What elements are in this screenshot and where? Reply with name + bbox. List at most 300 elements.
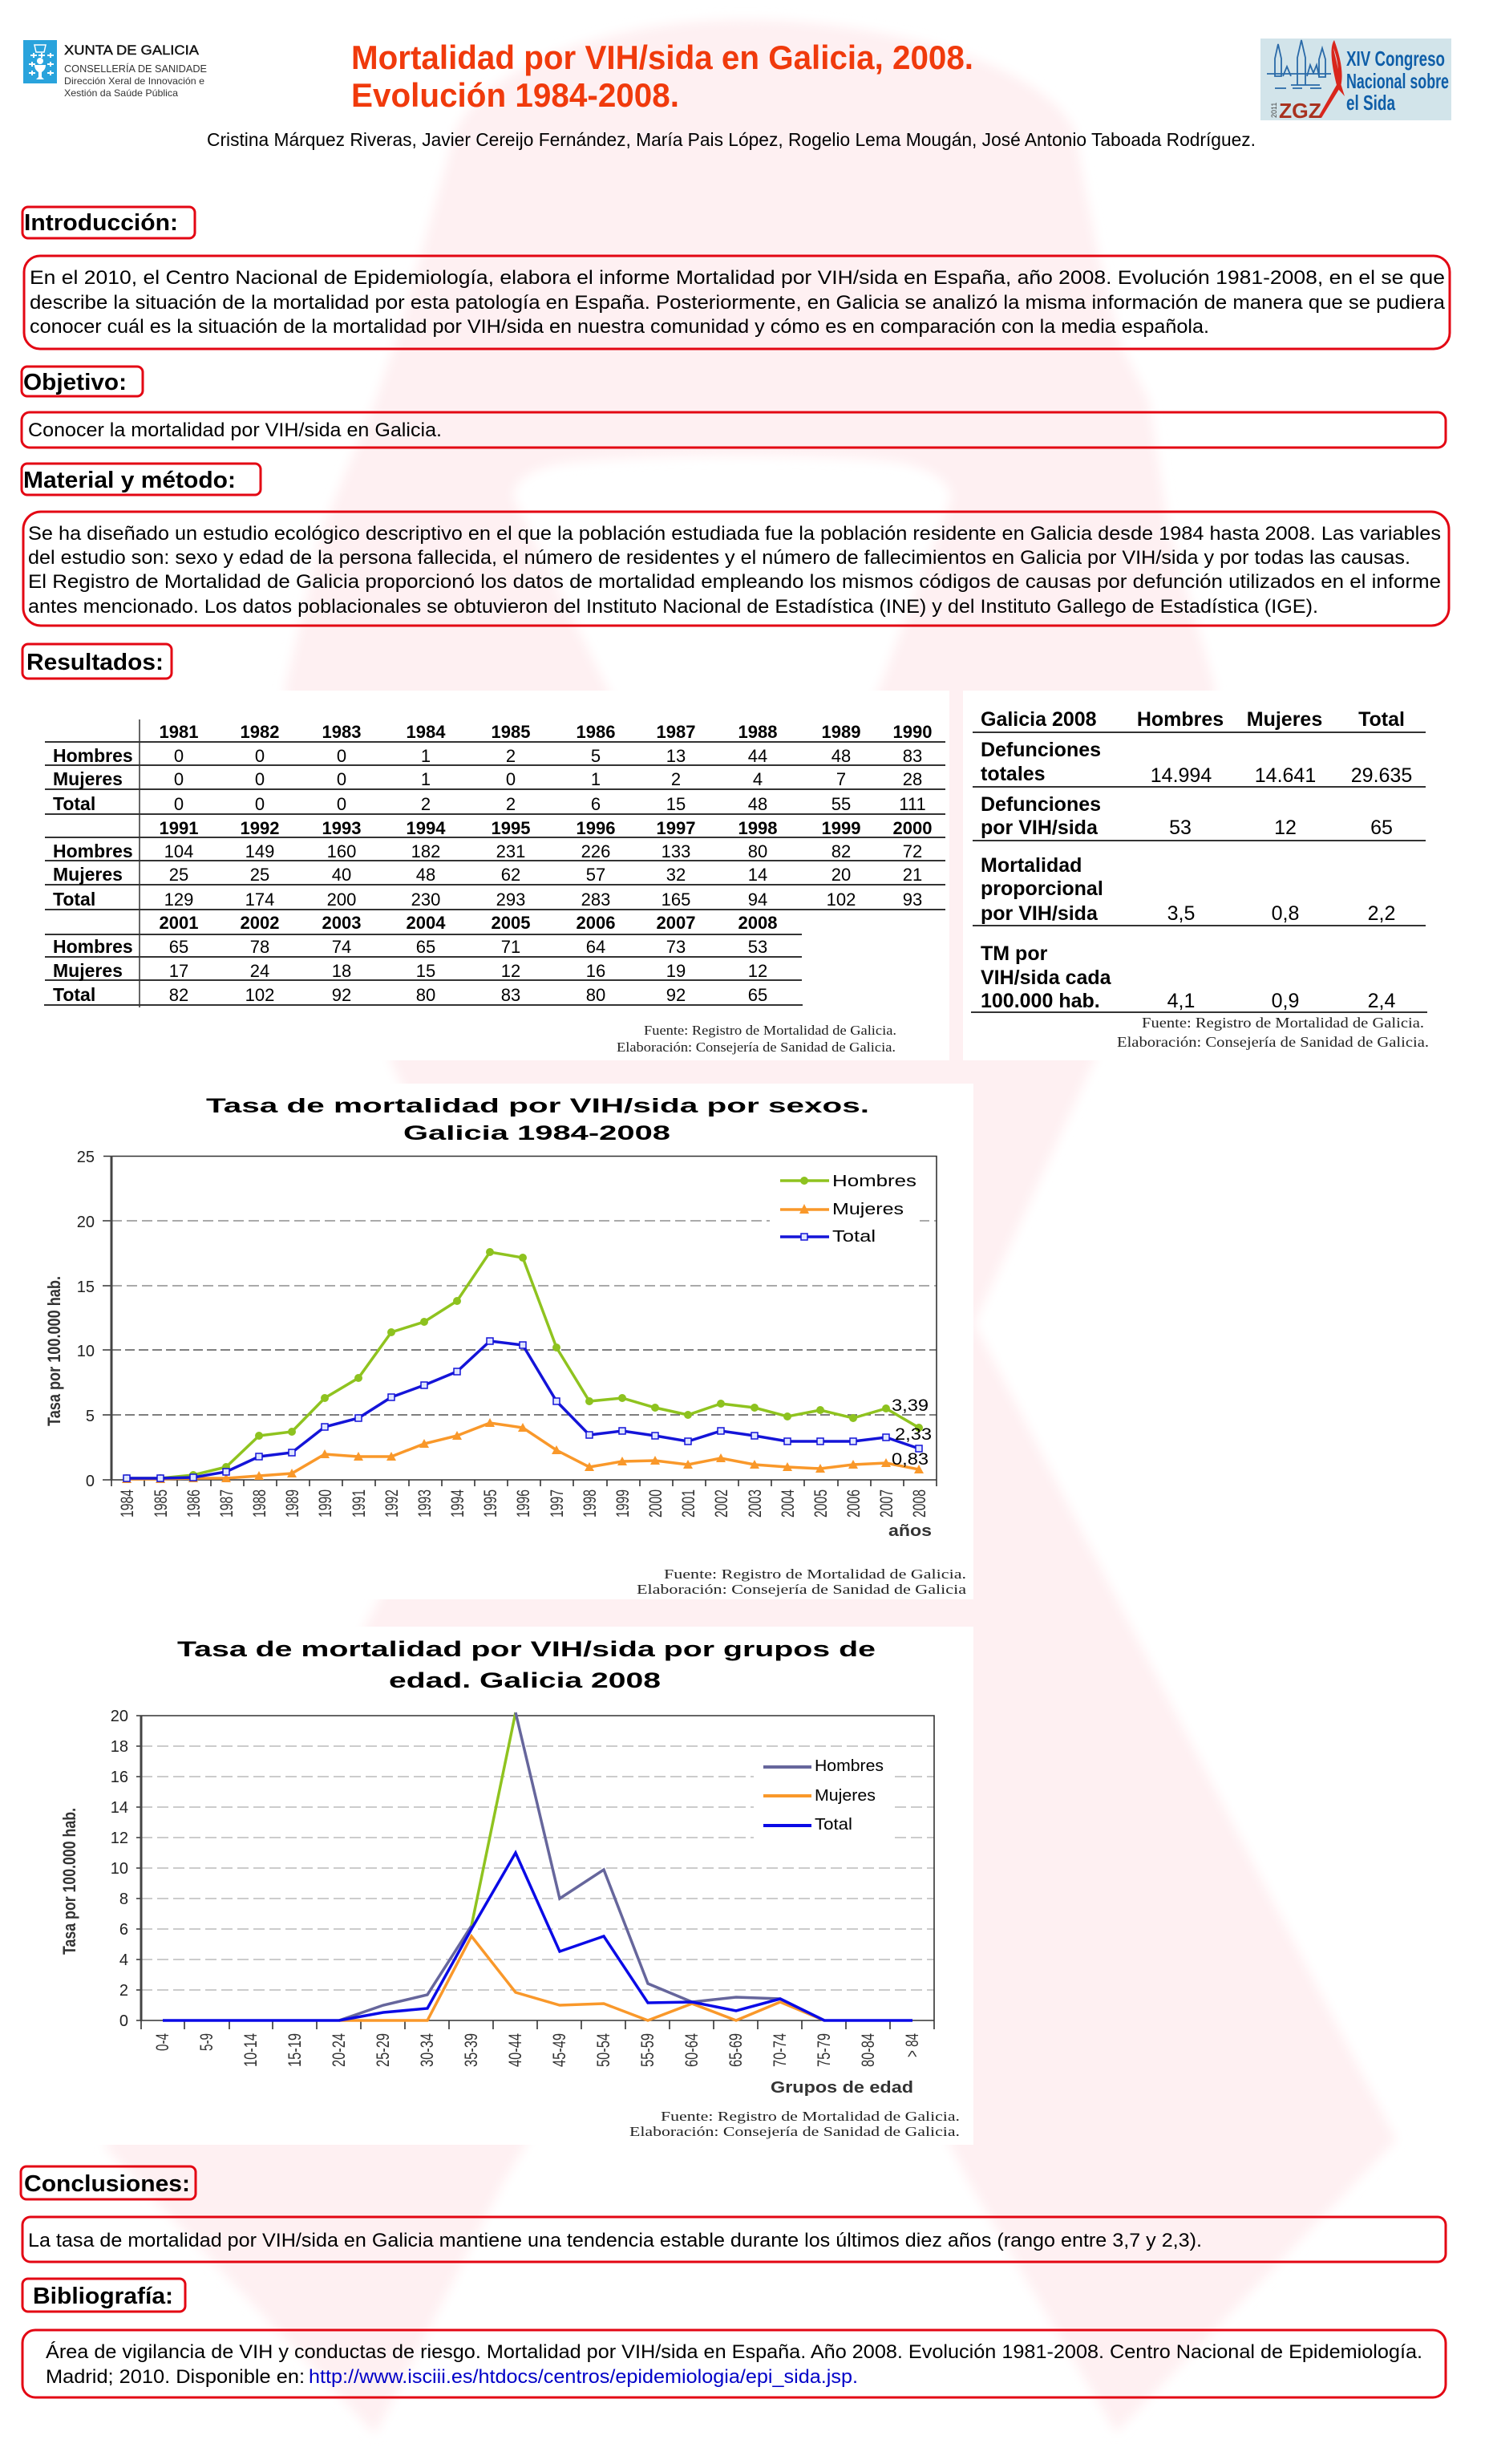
summary row labels: por VIH/sida (981, 902, 1099, 925)
series: Total (163, 1853, 912, 2020)
year labels (117, 1489, 929, 1518)
heading: Resultados: Resultados: (26, 650, 164, 675)
year headers: 1997 (657, 818, 695, 838)
panel: bibliografía text (22, 2330, 1446, 2397)
panel: conclusiones text: La tasa de mortalidad por VIH/sida en Galicia mantiene una tendencia estable durante los últimos diez años (rango entre 3,7 y 2,3). (28, 2230, 1202, 2251)
year headers: 1991 (160, 818, 198, 838)
age group labels: 30-34 (417, 2033, 437, 2067)
legend: Mujeres (815, 1787, 876, 1805)
logo text: Dirección Xeral de Innovación e (64, 75, 204, 87)
year labels: 1990 (315, 1489, 335, 1518)
year labels: 2002 (711, 1489, 731, 1518)
year headers: 1994 (407, 818, 446, 838)
panel: introducción text: conocer cuál es la situación de la mortalidad por VIH/sida en nuestra comunidad y cómo es en comparación con la media española. (30, 316, 1209, 338)
year labels: 2003 (745, 1489, 765, 1518)
table values: 226 (581, 841, 610, 861)
table values: 73 (666, 937, 686, 957)
table values: 53 (748, 937, 767, 957)
age group labels: 15-19 (285, 2033, 305, 2067)
chart title: Tasa de mortalidad por VIH/sida por sexos. (206, 1095, 869, 1117)
y axis labels: 12 (111, 1830, 128, 1847)
year headers: 2002 (241, 913, 279, 933)
end value labels: 2,33 (895, 1425, 932, 1444)
table values: 19 (666, 961, 686, 981)
panel: material y método text (23, 512, 1449, 626)
table values: 230 (411, 890, 440, 910)
year labels: 2004 (778, 1489, 798, 1518)
year labels: 1998 (580, 1489, 600, 1518)
table values: 25 (250, 865, 269, 885)
year headers: 1996 (577, 818, 615, 838)
age group labels: 50-54 (593, 2033, 613, 2067)
table values: 18 (332, 961, 351, 981)
table values: 82 (169, 985, 188, 1005)
summary row labels: TM por (981, 942, 1048, 965)
summary row labels: totales (981, 763, 1046, 785)
table values: 2 (421, 794, 431, 814)
age group labels: 25-29 (373, 2033, 393, 2067)
series: Mujeres (127, 1423, 919, 1479)
summary values: 14.641 (1255, 764, 1316, 787)
table values: 78 (250, 937, 269, 957)
summary source note: Fuente: Registro de Mortalidad de Galicia. (1142, 1015, 1424, 1031)
year headers: 1998 (738, 818, 777, 838)
y axis labels: 5 (86, 1408, 95, 1425)
year labels: 1999 (613, 1489, 633, 1518)
table values: 80 (586, 985, 605, 1005)
year headers: 2000 (893, 818, 932, 838)
summary source note (1117, 1015, 1429, 1050)
panel: bibliografía text: http://www.isciii.es/htdocs/centros/epidemiologia/epi_sida.jsp. (309, 2366, 858, 2388)
row labels: Mujeres (53, 768, 123, 789)
table values: 0 (255, 794, 265, 814)
year headers: 1987 (657, 722, 695, 742)
table values: 40 (332, 865, 351, 885)
y axis title: Tasa por 100.000 hab. (59, 1808, 79, 1955)
age group labels: > 84 (902, 2033, 922, 2057)
y axis labels (111, 1708, 128, 2030)
logo text: Xestión da Saúde Pública (64, 87, 178, 99)
table values: 149 (245, 841, 274, 861)
y axis labels: 8 (119, 1891, 128, 1908)
year headers: 1983 (322, 722, 361, 742)
table values: 129 (164, 890, 193, 910)
row labels: Hombres (53, 745, 133, 766)
table source note: Fuente: Registro de Mortalidad de Galicia. (644, 1023, 896, 1038)
table values: 1 (421, 746, 431, 766)
table values: 6 (591, 794, 601, 814)
summary row labels: Defunciones (981, 739, 1101, 761)
summary row labels (981, 708, 1405, 1012)
y axis labels: 15 (77, 1279, 95, 1296)
logo text: CONSELLERÍA DE SANIDADE (64, 63, 207, 75)
table values: 2 (506, 794, 516, 814)
series: Hombres descending (516, 1712, 824, 2020)
legend: Mujeres (832, 1201, 904, 1218)
summary row labels: 100.000 hab. (981, 990, 1100, 1012)
table values: 12 (748, 961, 767, 981)
year labels: 2005 (811, 1489, 831, 1518)
legend: Total (832, 1228, 876, 1246)
summary row labels: Hombres (1137, 708, 1224, 731)
year headers: 1992 (241, 818, 279, 838)
row labels: Total (53, 793, 95, 814)
panel: material y método text: del estudio son: sexo y edad de la persona fallecida, el número de residentes y el número de fallecimientos en Galicia por VIH/sida y por todas las causas. (28, 547, 1410, 569)
legend: Hombres (832, 1173, 916, 1190)
age group labels: 0-4 (152, 2033, 172, 2051)
row labels: Total (53, 984, 95, 1005)
row labels: Mujeres (53, 960, 123, 981)
congress name: XIV Congreso (1346, 47, 1445, 71)
chart title: edad. Galicia 2008 (389, 1668, 661, 1692)
end value labels (892, 1396, 932, 1469)
table rules (44, 742, 945, 1005)
table values: 283 (581, 890, 610, 910)
table values: 32 (666, 865, 686, 885)
table values: 93 (903, 890, 922, 910)
table values: 4 (753, 769, 763, 789)
row labels: Hombres (53, 936, 133, 957)
heading: Bibliografía (22, 2279, 185, 2312)
heading: Introducción: Introducción: (24, 210, 178, 236)
end value labels: 3,39 (892, 1396, 929, 1415)
table values: 174 (245, 890, 274, 910)
table values: 24 (250, 961, 269, 981)
gridlines (141, 1746, 934, 1990)
age group labels: 65-69 (726, 2033, 746, 2067)
age group labels: 20-24 (329, 2033, 349, 2067)
icon: Galicia shield square (23, 40, 57, 83)
table values: 182 (411, 841, 440, 861)
axes (136, 1716, 934, 2029)
age group labels: 60-64 (682, 2033, 702, 2067)
series: Hombres (127, 1252, 919, 1478)
year headers (160, 722, 932, 933)
panel: conclusiones text (22, 2217, 1446, 2262)
table values: 1 (421, 769, 431, 789)
summary values: 0,8 (1272, 902, 1299, 925)
heading: Conclusiones: Conclusiones: (24, 2171, 190, 2197)
heading: Material y método: Material y método: (23, 468, 236, 493)
x axis title: Grupos de edad (771, 2079, 913, 2097)
table values: 102 (827, 890, 856, 910)
year labels: 2008 (909, 1489, 929, 1518)
logo text: XUNTA DE GALICIA (64, 43, 200, 58)
y axis labels: 20 (77, 1214, 95, 1231)
summary values: 2,4 (1368, 990, 1395, 1012)
logo: XIV Congreso Nacional sobre el Sida: 2011 (1270, 103, 1278, 118)
table values: 17 (169, 961, 188, 981)
chart title: Galicia 1984-2008 (403, 1122, 670, 1145)
row labels: Mujeres (53, 864, 123, 885)
y axis labels: 14 (111, 1799, 128, 1817)
table values: 92 (332, 985, 351, 1005)
year headers: 2003 (322, 913, 361, 933)
series: Mujeres (339, 1936, 824, 2020)
year labels: 1995 (480, 1489, 500, 1518)
heading: Objetivo: Objetivo: (23, 370, 127, 395)
table values: 2 (671, 769, 681, 789)
x axis title: años (888, 1522, 932, 1540)
year headers: 1985 (492, 722, 530, 742)
year headers: 2007 (657, 913, 695, 933)
legend: Hombres (815, 1757, 884, 1775)
panel: objetivo text (22, 412, 1446, 448)
chart: tasa por grupos de edad (22, 1627, 973, 2145)
axes (103, 1157, 937, 1486)
table values: 15 (416, 961, 435, 981)
icon: Zaragoza skyline (1267, 40, 1331, 88)
year labels: 1994 (447, 1489, 467, 1518)
age group labels: 5-9 (196, 2033, 216, 2051)
summary row labels: Galicia 2008 (981, 708, 1097, 731)
year headers: 1982 (241, 722, 279, 742)
table values: 28 (903, 769, 922, 789)
y axis labels: 25 (77, 1149, 95, 1166)
table values: 0 (255, 769, 265, 789)
table values: 48 (748, 794, 767, 814)
summary row labels: Defunciones (981, 793, 1101, 816)
year labels: 1989 (282, 1489, 302, 1518)
table values: 0 (337, 769, 346, 789)
main title: Mortalidad por VIH/sida en Galicia, 2008. (351, 38, 973, 76)
summary values: 29.635 (1351, 764, 1412, 787)
table values: 165 (662, 890, 690, 910)
year headers: 2005 (492, 913, 530, 933)
table values: 16 (586, 961, 605, 981)
legend (780, 1173, 916, 1246)
table values: 92 (666, 985, 686, 1005)
summary values: 65 (1370, 817, 1393, 839)
chart source note (629, 2109, 960, 2139)
table values: 133 (662, 841, 690, 861)
year labels: 1993 (415, 1489, 435, 1518)
chart title (177, 1637, 876, 1692)
chart title: Tasa de mortalidad por VIH/sida por grupos de (177, 1637, 876, 1661)
table source note: Elaboración: Consejería de Sanidad de Galicia. (617, 1040, 896, 1055)
table values: 48 (416, 865, 435, 885)
age group labels (152, 2033, 922, 2067)
end value labels: 0,83 (892, 1450, 929, 1469)
age group labels: 45-49 (549, 2033, 569, 2067)
year labels: 2006 (844, 1489, 864, 1518)
year headers: 2006 (577, 913, 615, 933)
table values: 15 (666, 794, 686, 814)
logo text (64, 43, 207, 99)
series: Total (127, 1341, 919, 1478)
panel: material y método text: antes mencionado. Los datos poblacionales se obtuvieron del Instituto Nacional de Estadística (INE) y del Instituto Gallego de Estadística (IGE). (28, 596, 1318, 618)
year labels: 1992 (382, 1489, 402, 1518)
table values: 14 (748, 865, 767, 885)
table values: 57 (586, 865, 605, 885)
summary row labels: Mortalidad (981, 854, 1082, 877)
legend (763, 1757, 884, 1834)
legend: Total (815, 1816, 852, 1834)
chart: tasa por sexos (22, 1084, 973, 1599)
summary values: 0,9 (1272, 990, 1299, 1012)
table values: 80 (416, 985, 435, 1005)
table values: 0 (255, 746, 265, 766)
summary values: 53 (1169, 817, 1192, 839)
panel: bibliografía text: Área de vigilancia de VIH y conductas de riesgo. Mortalidad por VIH/sida en España. Año 2008. Evolución 1981-2008. Centro Nacional de Epidemiología. (46, 2341, 1422, 2363)
table values: 200 (327, 890, 356, 910)
congress name (1346, 47, 1449, 115)
panel: objetivo text: Conocer la mortalidad por VIH/sida en Galicia. (28, 419, 442, 441)
summary row labels: Mujeres (1247, 708, 1322, 731)
year labels: 1997 (547, 1489, 567, 1518)
age group labels: 55-59 (637, 2033, 658, 2067)
table values: 62 (501, 865, 520, 885)
table values: 21 (903, 865, 922, 885)
age group labels: 75-79 (814, 2033, 834, 2067)
year headers: 1988 (738, 722, 777, 742)
y axis labels: 20 (111, 1708, 128, 1725)
y axis title: Tasa por 100.000 hab. (44, 1276, 64, 1426)
ZGZ mark: ZGZ (1279, 99, 1321, 123)
year labels: 1988 (249, 1489, 269, 1518)
series: Hombres peak segment (471, 1712, 516, 1926)
summary values: 3,5 (1167, 902, 1195, 925)
table values: 44 (748, 746, 767, 766)
table values: 80 (748, 841, 767, 861)
year headers: 2008 (738, 913, 777, 933)
y axis labels: 10 (111, 1860, 128, 1878)
logo: XIV Congreso Nacional sobre el Sida (1260, 38, 1451, 123)
age group labels: 80-84 (858, 2033, 878, 2067)
panel: introducción text: describe la situación de la mortalidad por esta patología en España. Posteriormente, en Galicia se analizó la misma información de manera que se pudiera (30, 292, 1445, 314)
table values: 0 (174, 769, 184, 789)
panel: annual deaths table (22, 691, 949, 1060)
year headers: 1984 (407, 722, 446, 742)
table values: 0 (506, 769, 516, 789)
summary row labels: Total (1358, 708, 1405, 731)
y axis labels: 0 (86, 1473, 95, 1490)
y axis labels: 0 (119, 2012, 128, 2030)
age group labels: 70-74 (770, 2033, 790, 2067)
y axis labels: 2 (119, 1982, 128, 2000)
year labels: 1986 (184, 1489, 204, 1518)
table values: 0 (337, 746, 346, 766)
panel: material y método text: Se ha diseñado un estudio ecológico descriptivo en el que la población estudiada fue la población residente en Galicia desde 1984 hasta 2008. Las variables (28, 523, 1441, 545)
table source note (617, 1023, 896, 1055)
chart title (206, 1095, 869, 1145)
main title: Evolución 1984-2008. (351, 76, 679, 114)
table values: 71 (501, 937, 520, 957)
chart source note: Fuente: Registro de Mortalidad de Galicia. (661, 2109, 960, 2124)
year headers: 1999 (822, 818, 860, 838)
summary values (1151, 764, 1412, 1012)
year labels: 1984 (117, 1489, 137, 1518)
panel: introducción text: En el 2010, el Centro Nacional de Epidemiología, elabora el informe Mortalidad por VIH/sida en España, año 2008. Evolución 1981-2008, en el se que (30, 267, 1445, 289)
table values: 83 (903, 746, 922, 766)
icon: red ribbon (1318, 40, 1345, 118)
table values: 111 (899, 794, 926, 814)
summary values: 14.994 (1151, 764, 1212, 787)
main title (351, 38, 973, 114)
table values: 160 (327, 841, 356, 861)
table values: 12 (501, 961, 520, 981)
summary values: 2,2 (1368, 902, 1395, 925)
table values: 104 (164, 841, 193, 861)
year headers: 1995 (492, 818, 530, 838)
table values: 20 (831, 865, 851, 885)
year headers: 1981 (160, 722, 198, 742)
table values: 13 (666, 746, 686, 766)
table values: 65 (748, 985, 767, 1005)
row labels (53, 745, 133, 1005)
heading: Resultados (22, 644, 172, 679)
table values: 25 (169, 865, 188, 885)
year headers: 1986 (577, 722, 615, 742)
chart source note: Elaboración: Consejería de Sanidad de Galicia (637, 1582, 967, 1597)
y axis labels: 10 (77, 1343, 95, 1360)
year labels: 1991 (349, 1489, 369, 1518)
panel: introducción text (24, 256, 1450, 349)
summary row labels: VIH/sida cada (981, 967, 1112, 989)
panel: material y método text: El Registro de Mortalidad de Galicia proporcionó los datos de mortalidad empleando los mismos códigos de causas por defunción utilizados en el informe (28, 571, 1441, 593)
panel: bibliografía text: Madrid; 2010. Disponible en: (46, 2366, 305, 2388)
table values: 83 (501, 985, 520, 1005)
year headers: 2001 (160, 913, 198, 933)
table values: 2 (506, 746, 516, 766)
year labels: 1985 (151, 1489, 171, 1518)
year headers: 1993 (322, 818, 361, 838)
logo: Xunta de Galicia (23, 40, 207, 99)
y axis labels: 6 (119, 1921, 128, 1939)
row labels: Total (53, 889, 95, 910)
y axis labels: 4 (119, 1951, 128, 1969)
series: Hombres (339, 1926, 471, 2020)
table values: 0 (174, 746, 184, 766)
table values: 65 (416, 937, 435, 957)
chart source note: Elaboración: Consejería de Sanidad de Galicia. (629, 2124, 960, 2139)
y axis labels: 16 (111, 1769, 128, 1786)
year labels: 2007 (876, 1489, 896, 1518)
year headers: 1990 (893, 722, 932, 742)
summary values: 4,1 (1167, 990, 1195, 1012)
table values: 64 (586, 937, 605, 957)
table values: 82 (831, 841, 851, 861)
table values: 55 (831, 794, 851, 814)
row labels: Hombres (53, 841, 133, 861)
heading: Bibliografía: Bibliografía: (33, 2284, 173, 2309)
table values: 94 (748, 890, 767, 910)
authors: Cristina Márquez Riveras, Javier Cereijo Fernández, María Pais López, Rogelio Lema Mougán, José Antonio Taboada Rodríguez. (207, 129, 1256, 150)
table values: 5 (591, 746, 601, 766)
table values: 48 (831, 746, 851, 766)
table values: 65 (169, 937, 188, 957)
table values: 0 (174, 794, 184, 814)
congress name: el Sida (1346, 91, 1395, 115)
summary row labels: proporcional (981, 877, 1103, 900)
table values: 72 (903, 841, 922, 861)
year labels: 1987 (216, 1489, 237, 1518)
table values: 74 (332, 937, 351, 957)
gridlines (111, 1221, 937, 1415)
summary source note: Elaboración: Consejería de Sanidad de Galicia. (1117, 1034, 1429, 1050)
summary values: 12 (1274, 817, 1297, 839)
age group labels: 40-44 (505, 2033, 525, 2067)
table values: 1 (591, 769, 601, 789)
year labels: 1996 (513, 1489, 533, 1518)
table values (164, 746, 926, 1005)
year headers: 2004 (407, 913, 446, 933)
table values: 102 (245, 985, 274, 1005)
y axis labels: 18 (111, 1738, 128, 1756)
year labels: 2001 (678, 1489, 698, 1518)
panel: Galicia 2008 summary table (963, 691, 1460, 1060)
table values: 7 (836, 769, 846, 789)
